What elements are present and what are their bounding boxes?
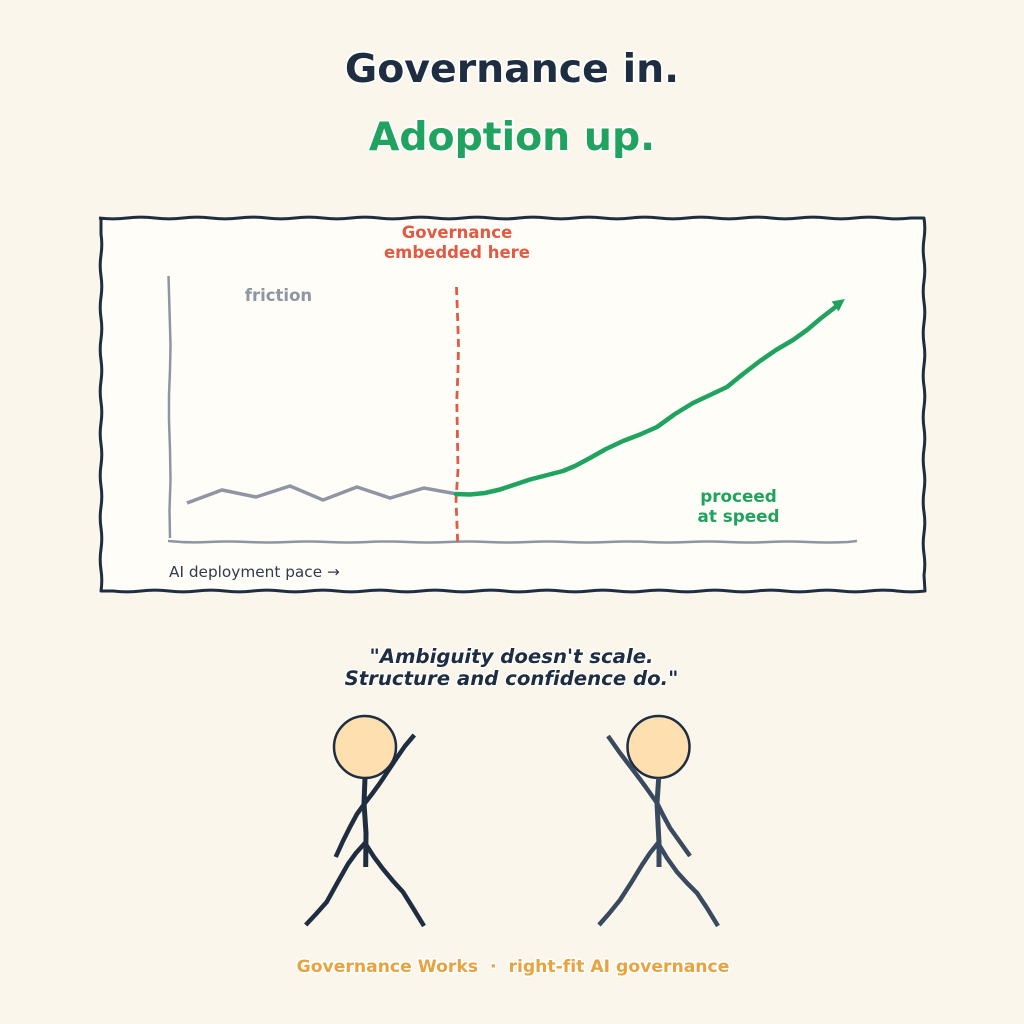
arms (336, 735, 414, 857)
footer: Governance Works · right-fit AI governance (297, 957, 729, 977)
torso (364, 778, 366, 867)
label: governance embedded here (384, 223, 530, 262)
arms (608, 736, 690, 856)
label: governance embedded here: embedded here (384, 243, 530, 262)
figure: right stick person (599, 716, 718, 926)
legs (306, 843, 424, 926)
quote: Structure and confidence do." (345, 667, 678, 690)
title: Governance in. (345, 46, 679, 92)
label: x axis title: AI deployment pace → (169, 563, 340, 581)
label: proceed at speed: at speed (698, 506, 779, 526)
label: friction: friction (245, 286, 312, 305)
legs (599, 843, 718, 926)
marker: dashed governance line (456, 287, 458, 543)
label: proceed at speed: proceed (700, 486, 777, 506)
torso (657, 778, 659, 867)
y axis (168, 276, 170, 538)
x axis (168, 541, 857, 542)
friction line (187, 486, 457, 503)
panel: chart frame (99, 217, 925, 592)
head (334, 716, 396, 778)
quote (345, 645, 678, 690)
quote: "Ambiguity doesn't scale. (369, 645, 654, 668)
figure: left stick person (306, 716, 424, 926)
label: proceed at speed (698, 486, 779, 526)
head (628, 716, 690, 778)
title: Adoption up. (369, 114, 655, 160)
title (345, 46, 679, 160)
label: governance embedded here: Governance (402, 223, 512, 242)
adoption curve with arrow (456, 300, 844, 494)
